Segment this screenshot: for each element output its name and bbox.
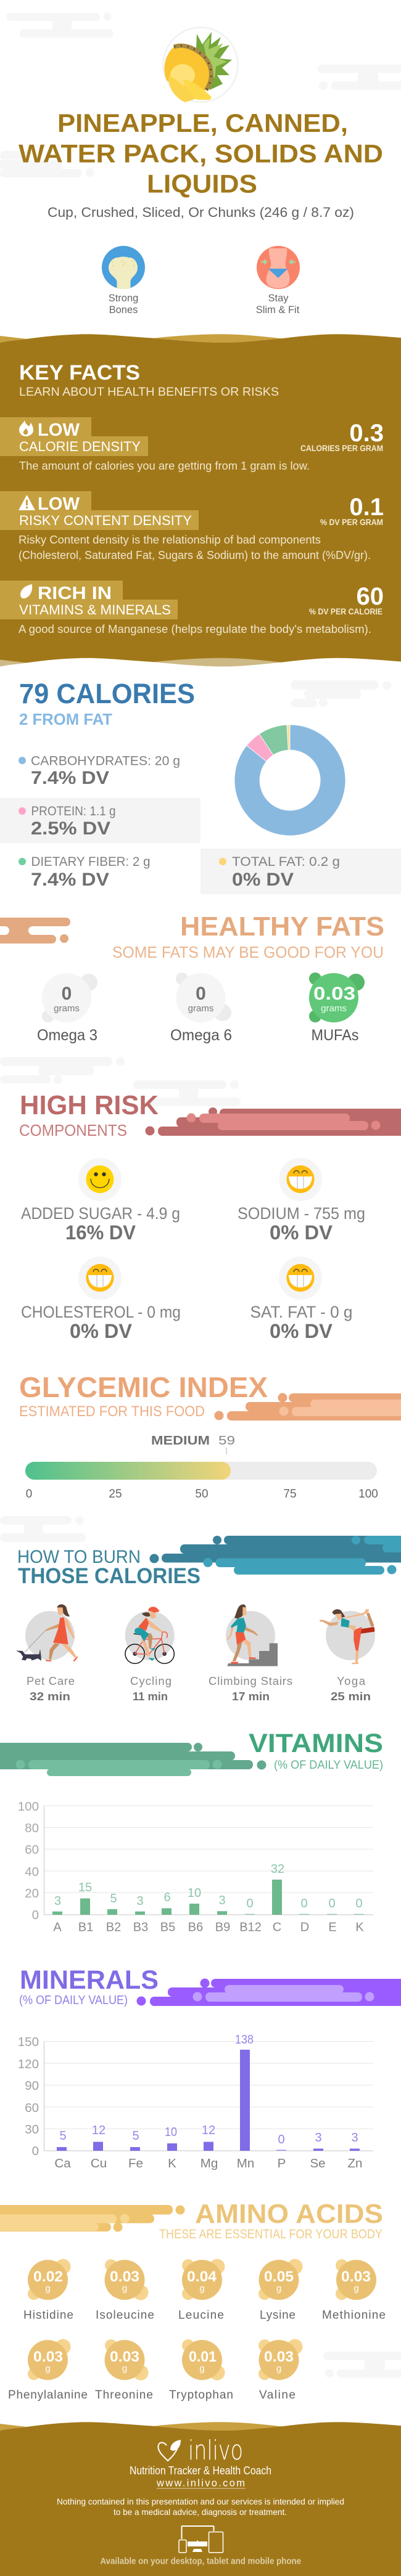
logo: inlivo xyxy=(188,2435,243,2466)
icon: strong bones xyxy=(102,246,145,289)
fact: calorie density: LOW xyxy=(38,420,80,440)
bar chart: minerals: 5 xyxy=(59,2129,67,2143)
bar chart: minerals: 90 xyxy=(25,2079,39,2093)
bar chart: vitamins: D xyxy=(300,1920,309,1934)
heading: AMINO ACIDS xyxy=(195,2199,383,2229)
logo xyxy=(158,2435,243,2466)
subheading: (% OF DAILY VALUE) xyxy=(274,1759,383,1772)
isoleucine: g xyxy=(122,2283,127,2294)
bar chart: vitamins: 20 xyxy=(25,1886,39,1901)
activity: pet care: Pet Care xyxy=(27,1674,75,1687)
subheading: SOME FATS MAY BE GOOD FOR YOU xyxy=(112,943,384,961)
threonine: 0.03 xyxy=(110,2349,139,2365)
title: LIQUIDS xyxy=(147,169,257,198)
bar chart: vitamins: 3 xyxy=(218,1894,226,1907)
histidine: g xyxy=(45,2283,51,2294)
panel: how to burn those calories xyxy=(16,1536,401,1703)
bar chart: vitamins: 0 xyxy=(300,1897,308,1910)
bar chart: minerals: Se xyxy=(310,2156,326,2170)
omega 6: 0 xyxy=(196,984,206,1004)
isoleucine: 0.03 xyxy=(110,2268,139,2285)
bar chart: vitamins: 0 xyxy=(328,1897,336,1910)
decorative band xyxy=(146,1107,401,1136)
activity: climbing stairs: 17 min xyxy=(232,1690,270,1703)
bar chart: minerals: 3 xyxy=(315,2131,322,2145)
saturated fat: SAT. FAT - 0 g xyxy=(250,1303,353,1321)
fact: rich in vitamins and minerals xyxy=(0,581,384,635)
methionine: 0.03 xyxy=(341,2268,371,2285)
fact: rich in vitamins and minerals: A good source of Manganese (helps regulate the body's metabolism). xyxy=(19,623,371,635)
mufas xyxy=(309,972,365,1044)
bar chart: vitamins: 6 xyxy=(163,1891,171,1904)
cholesterol xyxy=(21,1257,181,1342)
bar chart: minerals: 0 xyxy=(32,2144,39,2158)
fact: calorie density: 0.3 xyxy=(349,420,384,447)
sodium: SODIUM - 755 mg xyxy=(238,1204,365,1223)
panel: amino acids xyxy=(0,2199,386,2402)
donut chart xyxy=(234,725,345,836)
methionine xyxy=(322,2259,386,2322)
decorative band xyxy=(0,2205,185,2232)
fact: risky content density: % DV PER GRAM xyxy=(320,518,383,527)
legend: total fat: TOTAL FAT: 0.2 g xyxy=(232,855,340,869)
fact: risky content density: RISKY CONTENT DENSITY xyxy=(19,513,192,528)
wave bottom xyxy=(0,658,281,667)
bar chart: minerals: 5 xyxy=(132,2129,139,2143)
leucine xyxy=(178,2259,225,2322)
omega 3: Omega 3 xyxy=(37,1027,97,1044)
cholesterol: 0% DV xyxy=(70,1320,133,1342)
bar chart: minerals: Fe xyxy=(128,2156,143,2170)
fact: rich in vitamins and minerals: % DV PER CALORIE xyxy=(309,607,382,616)
gauge bar xyxy=(25,1462,377,1480)
heading: HIGH RISK xyxy=(20,1090,159,1120)
panel: healthy fats xyxy=(0,911,384,1044)
bar chart: minerals xyxy=(18,2033,373,2170)
gauge scale: 50 xyxy=(195,1488,209,1501)
mufas: grams xyxy=(321,1003,347,1014)
gauge reading: 59 xyxy=(218,1434,235,1448)
decorative band xyxy=(215,1393,401,1420)
icon: devices xyxy=(179,2526,223,2553)
bar chart: vitamins: 5 xyxy=(110,1892,117,1906)
bar chart: vitamins: 60 xyxy=(25,1843,39,1857)
panel: minerals xyxy=(18,1965,401,2170)
added sugar xyxy=(21,1158,180,1244)
activity: cycling: 11 min xyxy=(133,1690,168,1703)
subheading: (% OF DAILY VALUE) xyxy=(19,1994,128,2007)
legend: protein: 2.5% DV xyxy=(31,818,110,839)
isoleucine: Isoleucine xyxy=(96,2309,154,2322)
bar chart: vitamins: 32 xyxy=(271,1862,284,1876)
bar chart: minerals: 138 xyxy=(235,2033,254,2047)
panel: high risk components xyxy=(19,1090,401,1342)
heading line 2: THOSE CALORIES xyxy=(18,1564,200,1588)
lysine: g xyxy=(276,2283,281,2294)
bar chart: vitamins xyxy=(18,1800,373,1934)
activity: climbing stairs: Climbing Stairs xyxy=(209,1674,292,1687)
bar chart: minerals: K xyxy=(168,2156,176,2170)
bar chart: vitamins: B1 xyxy=(78,1920,93,1934)
bar chart: minerals: 0 xyxy=(278,2133,285,2146)
website: www.inlivo.com xyxy=(156,2477,245,2488)
activity: climbing stairs xyxy=(209,1604,292,1703)
heading line 1: HOW TO BURN xyxy=(17,1547,141,1567)
fact: rich in vitamins and minerals: VITAMINS & MINERALS xyxy=(19,602,171,618)
subheading: LEARN ABOUT HEALTH BENEFITS OR RISKS xyxy=(19,386,279,399)
histidine: 0.02 xyxy=(33,2268,63,2285)
fact: calorie density: CALORIES PER GRAM xyxy=(300,444,383,453)
isoleucine xyxy=(96,2259,154,2322)
availability note: Available on your desktop, tablet and mobile phone xyxy=(100,2556,301,2566)
subheading: 2 FROM FAT xyxy=(19,710,112,728)
decorative band xyxy=(149,1536,401,1575)
heading: GLYCEMIC INDEX xyxy=(19,1371,268,1403)
tryptophan xyxy=(169,2339,233,2402)
leucine: g xyxy=(199,2283,205,2294)
bar chart: minerals: 120 xyxy=(18,2057,39,2071)
fact: risky content density: Risky Content density is the relationship of bad components xyxy=(19,534,321,546)
sodium xyxy=(238,1158,365,1244)
fact: risky content density: LOW xyxy=(38,494,80,514)
bar chart: vitamins: B3 xyxy=(133,1920,148,1934)
bar chart: minerals: 12 xyxy=(202,2124,215,2137)
bar chart: minerals: Mn xyxy=(237,2156,254,2170)
lysine xyxy=(258,2259,302,2322)
leucine: 0.04 xyxy=(187,2268,217,2285)
footer wave xyxy=(0,2422,281,2431)
gauge reading: MEDIUM xyxy=(151,1434,210,1448)
phenylalanine xyxy=(8,2339,88,2402)
tryptophan: 0.01 xyxy=(189,2349,217,2365)
tryptophan: Tryptophan xyxy=(169,2389,233,2402)
added sugar: 16% DV xyxy=(65,1221,136,1244)
icon labels: Stay xyxy=(268,293,289,304)
wave top xyxy=(0,334,281,343)
heading: 79 CALORIES xyxy=(19,678,195,709)
fact: risky content density: 0.1 xyxy=(349,494,384,521)
legend: total fat xyxy=(200,849,401,894)
omega 6: grams xyxy=(188,1003,213,1014)
bar chart: vitamins: B12 xyxy=(239,1920,262,1934)
panel: footer xyxy=(0,2422,401,2576)
fact: rich in vitamins and minerals: RICH IN xyxy=(38,584,112,603)
threonine: g xyxy=(122,2363,127,2374)
omega 6 xyxy=(170,972,232,1044)
histidine: Histidine xyxy=(23,2309,73,2322)
threonine xyxy=(95,2339,153,2402)
panel: glycemic index xyxy=(19,1371,401,1501)
activity: cycling xyxy=(125,1607,175,1703)
omega 3: 0 xyxy=(62,984,72,1004)
methionine: Methionine xyxy=(322,2309,386,2322)
gauge reading xyxy=(151,1434,235,1454)
mufas: 0.03 xyxy=(313,984,355,1004)
activity: yoga: Yoga xyxy=(337,1674,366,1687)
lysine: 0.05 xyxy=(264,2268,294,2285)
cholesterol: CHOLESTEROL - 0 mg xyxy=(21,1303,181,1321)
activity: yoga xyxy=(320,1609,375,1703)
fact: risky content density xyxy=(0,491,384,561)
bar chart: vitamins: 0 xyxy=(32,1908,39,1922)
valine xyxy=(258,2339,302,2402)
icon: slim and fit xyxy=(257,246,300,289)
bar chart: vitamins: 3 xyxy=(54,1894,61,1908)
bar chart: vitamins: 100 xyxy=(18,1800,39,1814)
bar chart: vitamins: 3 xyxy=(136,1894,144,1908)
saturated fat xyxy=(250,1257,353,1342)
bar chart: vitamins: 0 xyxy=(246,1897,254,1910)
bar chart: vitamins: 80 xyxy=(25,1821,39,1835)
bar chart: vitamins: K xyxy=(355,1920,364,1934)
activity: cycling: Cycling xyxy=(130,1674,172,1687)
title: PINEAPPLE, CANNED, xyxy=(57,108,348,137)
bar chart: minerals: 10 xyxy=(165,2126,177,2139)
legend: dietary fiber xyxy=(19,855,151,890)
legend: dietary fiber: DIETARY FIBER: 2 g xyxy=(31,855,151,869)
legend: protein xyxy=(0,798,200,843)
bar chart: minerals: 150 xyxy=(18,2035,39,2049)
decorative band xyxy=(0,918,70,944)
tagline: Nutrition Tracker & Health Coach xyxy=(130,2464,271,2477)
subheading: ESTIMATED FOR THIS FOOD xyxy=(19,1403,205,1420)
omega 3 xyxy=(37,973,97,1044)
decorative band xyxy=(0,1743,267,1776)
legend: dietary fiber: 7.4% DV xyxy=(31,870,109,890)
sodium: 0% DV xyxy=(270,1221,333,1244)
icon labels xyxy=(109,293,300,316)
tryptophan: g xyxy=(199,2363,205,2374)
icon labels: Bones xyxy=(109,304,138,316)
bar chart: vitamins: B6 xyxy=(188,1920,203,1934)
heading: MINERALS xyxy=(20,1965,159,1995)
bar chart: minerals: P xyxy=(278,2156,286,2170)
gauge scale: 75 xyxy=(283,1488,297,1501)
phenylalanine: Phenylalanine xyxy=(8,2389,88,2402)
title xyxy=(19,108,383,198)
gauge scale xyxy=(26,1488,378,1501)
panel: vitamins xyxy=(0,1729,383,1934)
panel: calories xyxy=(0,678,401,894)
methionine: g xyxy=(353,2283,359,2294)
gauge scale: 100 xyxy=(358,1488,378,1501)
header xyxy=(19,27,383,316)
bar chart: minerals: 3 xyxy=(351,2131,358,2145)
icon labels: Strong xyxy=(109,293,138,304)
valine: g xyxy=(276,2363,281,2374)
bar chart: vitamins: A xyxy=(53,1920,62,1934)
legend: total fat: 0% DV xyxy=(232,870,294,890)
phenylalanine: g xyxy=(45,2363,51,2374)
saturated fat: 0% DV xyxy=(270,1320,333,1342)
heading: VITAMINS xyxy=(249,1729,383,1758)
disclaimer: Nothing contained in this presentation and our services is intended or implied xyxy=(57,2497,344,2506)
panel: key facts xyxy=(0,334,401,675)
gauge scale: 25 xyxy=(109,1488,122,1501)
activity: pet care xyxy=(16,1604,78,1703)
leucine: Leucine xyxy=(178,2309,224,2322)
omega 3: grams xyxy=(54,1003,80,1014)
lysine: Lysine xyxy=(260,2309,296,2322)
valine: 0.03 xyxy=(264,2349,294,2365)
icon: pineapple xyxy=(163,27,238,102)
valine: Valine xyxy=(259,2389,296,2402)
added sugar: ADDED SUGAR - 4.9 g xyxy=(21,1204,180,1223)
omega 6: Omega 6 xyxy=(170,1027,232,1044)
histidine xyxy=(23,2259,73,2322)
bar chart: minerals: Cu xyxy=(91,2156,107,2170)
legend: carbohydrates: CARBOHYDRATES: 20 g xyxy=(31,754,180,768)
disclaimer: to be a medical advice, diagnosis or treatment. xyxy=(114,2507,287,2517)
bar chart: vitamins: 40 xyxy=(25,1865,39,1879)
fact: calorie density: The amount of calories you are getting from 1 gram is low. xyxy=(19,460,310,472)
bar chart: minerals: Zn xyxy=(348,2156,362,2170)
legend: protein: PROTEIN: 1.1 g xyxy=(31,804,116,818)
bar chart: vitamins: B9 xyxy=(215,1920,230,1934)
gauge scale: 0 xyxy=(26,1488,32,1501)
legend: carbohydrates: 7.4% DV xyxy=(31,768,109,788)
mufas: MUFAs xyxy=(311,1027,359,1044)
legend: carbohydrates xyxy=(19,754,180,788)
bar chart: vitamins: C xyxy=(273,1920,281,1934)
fact: calorie density xyxy=(0,417,384,472)
bar chart: minerals: Ca xyxy=(54,2156,71,2170)
heading: HEALTHY FATS xyxy=(180,911,384,942)
disclaimer xyxy=(57,2497,344,2517)
bar chart: vitamins: 15 xyxy=(78,1881,92,1894)
bar chart: vitamins: E xyxy=(328,1920,337,1934)
fact: risky content density: (Cholesterol, Saturated Fat, Sugars & Sodium) to the amount (%DV/gr). xyxy=(19,549,371,561)
bar chart: minerals: 60 xyxy=(25,2101,39,2115)
heading: KEY FACTS xyxy=(19,361,140,385)
bar chart: vitamins: 10 xyxy=(188,1886,201,1900)
activity: pet care: 32 min xyxy=(30,1690,70,1703)
phenylalanine: 0.03 xyxy=(33,2349,63,2365)
decorative band xyxy=(137,1978,401,2006)
bar chart: vitamins: B5 xyxy=(160,1920,175,1934)
bar chart: minerals: Mg xyxy=(200,2156,218,2170)
serving size: Cup, Crushed, Sliced, Or Chunks (246 g / 8.7 oz) xyxy=(48,205,354,220)
bar chart: minerals: 30 xyxy=(25,2122,39,2137)
threonine: Threonine xyxy=(95,2389,153,2402)
title: WATER PACK, SOLIDS AND xyxy=(19,139,383,168)
bar chart: minerals: 12 xyxy=(92,2124,105,2137)
footer background xyxy=(0,2422,401,2576)
bar chart: vitamins: 0 xyxy=(355,1897,363,1910)
fact: rich in vitamins and minerals: 60 xyxy=(357,583,384,610)
icon labels: Slim & Fit xyxy=(256,304,300,316)
subheading: COMPONENTS xyxy=(19,1121,127,1139)
bar chart: vitamins: B2 xyxy=(106,1920,121,1934)
fact: calorie density: CALORIE DENSITY xyxy=(19,439,141,454)
activity: yoga: 25 min xyxy=(331,1690,371,1703)
